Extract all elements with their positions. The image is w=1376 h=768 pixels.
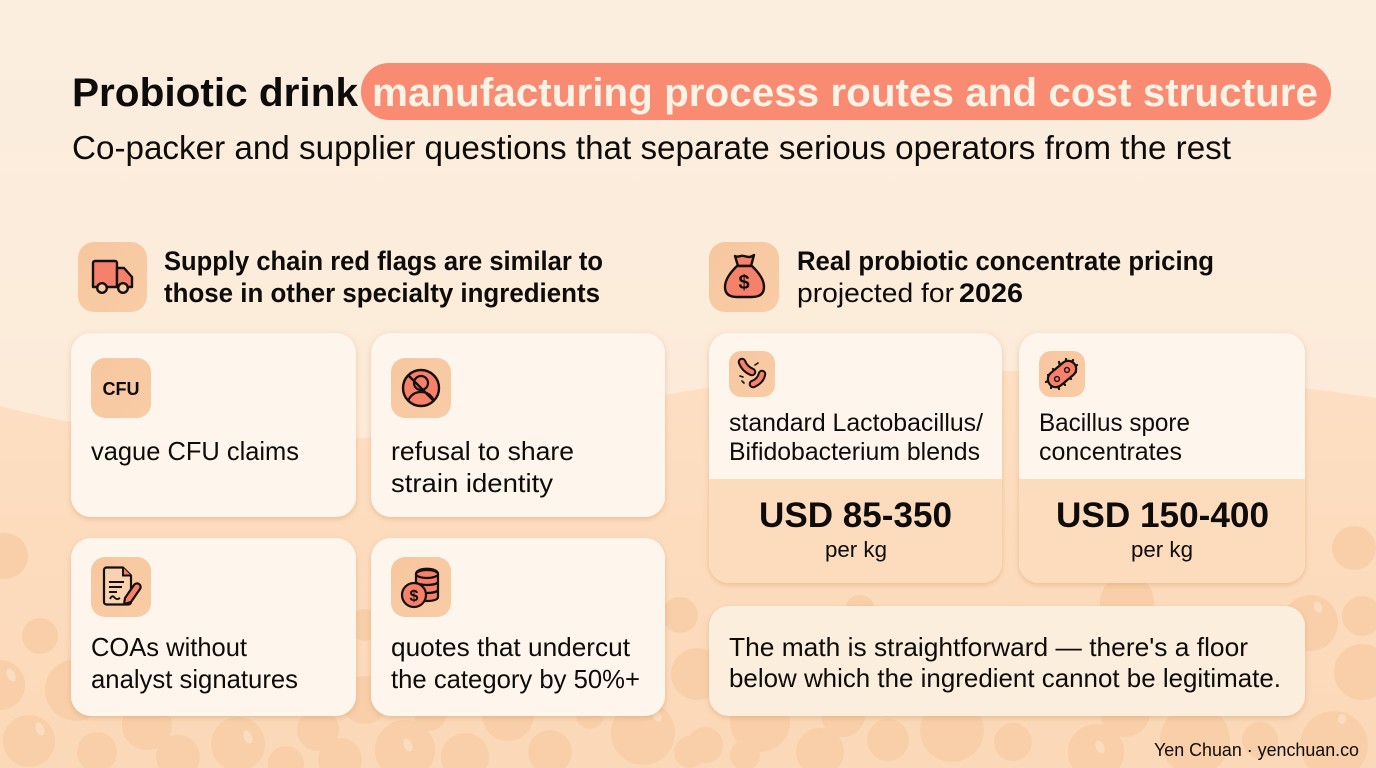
card text: COAs without <box>91 632 248 662</box>
card text: quotes that undercut <box>391 632 631 662</box>
icon: rod bacteria <box>729 351 775 397</box>
price: USD 85-350 <box>759 496 952 535</box>
section: supply chain red flags <box>78 242 603 312</box>
icon: signed document <box>91 557 151 617</box>
card: refusal to share strain identity <box>371 333 665 517</box>
section heading: 2026 <box>959 278 1023 308</box>
section heading: Real probiotic concentrate pricing <box>797 246 1214 276</box>
card text: vague CFU claims <box>91 436 299 466</box>
title: Probiotic drink <box>72 71 359 115</box>
callout: The math is straightforward — there's a floor <box>729 632 1248 662</box>
icon: CFU badge <box>91 358 151 418</box>
price <box>759 496 952 562</box>
price <box>1056 496 1269 562</box>
icon: money bag <box>709 242 779 312</box>
price: USD 150-400 <box>1056 496 1269 535</box>
card text: standard Lactobacillus/ <box>729 409 983 437</box>
section heading: Supply chain red flags are similar to <box>164 246 603 276</box>
callout <box>709 606 1305 716</box>
icon: crossed-out person <box>391 358 451 418</box>
card: quotes that undercut <box>371 538 665 716</box>
card text <box>729 409 983 466</box>
title <box>72 63 1331 120</box>
icon: coins with dollar: $ <box>410 588 419 605</box>
card text <box>391 632 640 694</box>
price card: Lactobacillus/Bifidobacterium blends <box>709 333 1002 583</box>
price card: Bacillus spore concentrates <box>1019 333 1305 583</box>
card text: the category by 50%+ <box>391 664 640 694</box>
card text: Bacillus spore <box>1039 409 1190 437</box>
card text: analyst signatures <box>91 664 298 694</box>
card text <box>1039 409 1190 466</box>
callout: below which the ingredient cannot be legitimate. <box>729 663 1281 693</box>
footer credit: Yen Chuan · yenchuan.co <box>1154 740 1359 760</box>
title highlight pill: manufacturing process routes and cost structure <box>372 71 1318 115</box>
price: per kg <box>825 537 887 562</box>
icon: money bag: $ <box>738 272 750 294</box>
subtitle: Co-packer and supplier questions that separate serious operators from the rest <box>72 129 1231 166</box>
section: concentrate pricing <box>709 242 1214 312</box>
card text: concentrates <box>1039 438 1182 466</box>
section heading: projected for <box>797 278 954 308</box>
card text: Bifidobacterium blends <box>729 438 980 466</box>
card: COAs without analyst signatures <box>71 538 356 716</box>
card text: strain identity <box>391 468 553 498</box>
icon: delivery truck <box>78 242 147 312</box>
icon: CFU badge: CFU <box>102 379 140 399</box>
price: per kg <box>1131 537 1193 562</box>
section heading <box>797 246 1214 308</box>
section heading: those in other specialty ingredients <box>164 278 600 308</box>
card: vague CFU claims <box>71 333 356 517</box>
icon: spore bacterium <box>1039 351 1085 397</box>
card text <box>91 632 298 694</box>
section heading <box>164 246 603 308</box>
card text <box>391 436 574 498</box>
icon: coins with dollar <box>391 557 451 617</box>
card text: refusal to share <box>391 436 574 466</box>
